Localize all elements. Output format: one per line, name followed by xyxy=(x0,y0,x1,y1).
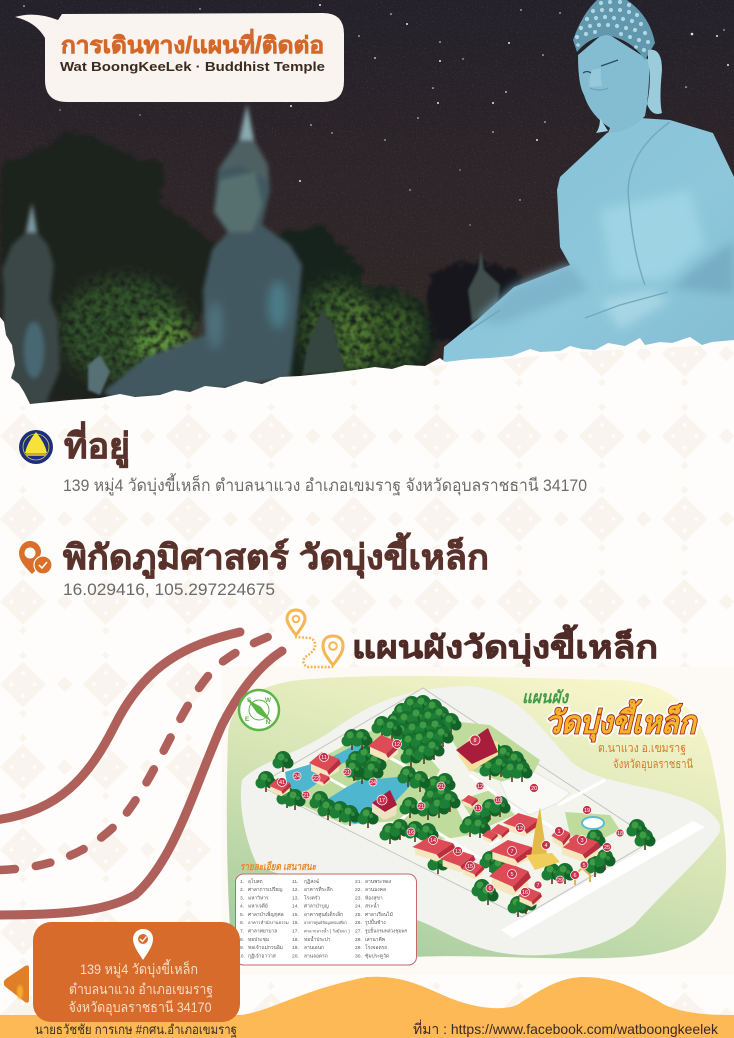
legend column one: 10. xyxy=(238,954,245,960)
footer wave xyxy=(0,977,734,1038)
icon: route pins xyxy=(287,610,343,667)
footer source link: ที่มา : https://www.facebook.com/watboongkeelek xyxy=(413,1020,719,1037)
map title xyxy=(522,688,698,772)
legend column two: 17. xyxy=(292,928,299,934)
buildings xyxy=(269,735,601,907)
dark foliage xyxy=(0,130,525,400)
lit green foliage xyxy=(60,278,423,382)
number badges: 4 xyxy=(544,843,548,849)
number badges: 16 xyxy=(408,830,414,836)
legend column one: ศาลาการเปรียญ xyxy=(248,886,282,893)
map green backdrop xyxy=(227,676,726,962)
number badges: 12 xyxy=(517,826,523,832)
ponds xyxy=(285,745,411,824)
torn paper panel xyxy=(0,317,734,420)
number badges: 6 xyxy=(488,886,492,892)
number badges: 21 xyxy=(303,793,309,799)
number badges: 21 xyxy=(418,804,424,810)
number badges: 18 xyxy=(617,831,623,837)
tree clusters xyxy=(256,695,656,917)
number badges: 25 xyxy=(604,845,610,851)
number badges: 41 xyxy=(279,780,285,786)
legend column one: ศาลาพยาบาล xyxy=(248,928,277,934)
legend column two: อาคารที่ระลึก xyxy=(304,886,333,893)
legend column two: ศาลากลางน้ำ ( วังมัจฉา ) xyxy=(304,928,350,934)
number badges: 19 xyxy=(584,808,590,814)
map title: temple name: วัดบุ่งขี้เหล็ก xyxy=(545,699,698,742)
face detail xyxy=(583,60,618,73)
legend column two: 14. xyxy=(292,904,299,910)
white access road xyxy=(501,821,705,938)
pattern on torn panel xyxy=(0,344,734,430)
legend column two: ลานเอนก xyxy=(304,946,324,951)
number badges: 20 xyxy=(531,786,537,792)
middle statue xyxy=(103,104,302,400)
legend column three: 26. xyxy=(355,920,362,926)
legend column one: 5. xyxy=(240,912,244,918)
legend column one: หอประชุม xyxy=(248,937,269,943)
title: การเดินทาง/แผนที่/ติดต่อ xyxy=(61,28,324,58)
title bubble xyxy=(15,13,344,102)
number badges: 13 xyxy=(455,849,461,855)
legend column three: 25. xyxy=(355,912,362,918)
number badges: 22 xyxy=(313,776,319,782)
heading: temple plan: แผนผังวัดบุ่งขี้เหล็ก xyxy=(352,624,658,667)
legend column one: หอเจ้าแม่กวนอิม xyxy=(248,944,283,951)
legend column two: หอน้ำประปา xyxy=(304,934,331,943)
number badges: 21 xyxy=(344,770,350,776)
legend column one: 7. xyxy=(240,928,244,934)
map title: district: ต.นาแวง อ.เขมราฐ xyxy=(598,741,686,755)
number badges: 11 xyxy=(321,755,327,761)
number badges: 1 xyxy=(557,829,561,835)
legend heading: รายละเอียด เสนาสนะ xyxy=(240,860,317,873)
subtitle: Wat BoongKeeLek · Buddhist Temple xyxy=(60,60,325,74)
number badges: 10 xyxy=(495,798,501,804)
number badges: 5 xyxy=(510,872,514,878)
legend column one: มหาวิหาร xyxy=(248,896,269,902)
ear xyxy=(647,50,662,114)
number badges: 21 xyxy=(438,784,444,790)
legend column three: 21. xyxy=(355,879,362,885)
legend column one: 6. xyxy=(240,920,244,926)
legend column two: ศาลาบำบุญ xyxy=(304,904,329,910)
number badges: 5 xyxy=(582,863,586,869)
legend column one: 2. xyxy=(240,887,244,893)
legend column two: 11. xyxy=(292,879,298,885)
map title: province: จังหวัดอุบลราชธานี xyxy=(613,757,693,772)
legend column two: อาคารศูนย์ข้อมูลท่องเที่ยว xyxy=(304,920,347,925)
number badges: 24 xyxy=(294,774,300,780)
number badges: 17 xyxy=(379,798,385,804)
map section backdrop xyxy=(222,667,734,975)
address text: 139 หมู่4 วัดบุ่งขี้เหล็ก ตำบลนาแวง อำเภอเขมราฐ จังหวัดอุบลราชธานี 34170 xyxy=(63,473,587,496)
legend column three: สระน้ำ xyxy=(365,900,380,910)
stars xyxy=(23,4,729,226)
legend column two: กุฏิสงฆ์ xyxy=(304,878,320,885)
large right statue xyxy=(443,0,734,365)
compass: E xyxy=(245,716,250,723)
grey ground xyxy=(241,686,720,955)
site ground xyxy=(258,688,653,917)
number badges: 16 xyxy=(522,890,528,896)
legend column three: ศาลาเรือนไม้ xyxy=(365,911,393,918)
temple site map xyxy=(227,676,726,965)
heading: coordinates: พิกัดภูมิศาสตร์ วัดบุ่งขี้เหล็ก xyxy=(63,532,489,579)
legend column two: ลานจอดรถ xyxy=(304,954,328,960)
legend column three: ลานมงคล xyxy=(365,888,386,893)
left statue xyxy=(2,203,60,405)
icon: emblem xyxy=(19,430,53,464)
map title: plan: แผนผัง xyxy=(522,688,570,707)
legend column two: 19. xyxy=(292,945,299,951)
address card xyxy=(33,922,240,1022)
legend column two: 20. xyxy=(292,954,299,960)
number badges: 24 xyxy=(370,780,376,786)
legend column three: ห้องสุขา xyxy=(365,894,383,902)
roundabout xyxy=(582,817,604,829)
compass: S xyxy=(247,697,252,704)
number badges: 14 xyxy=(430,838,436,844)
white paths xyxy=(305,755,605,870)
legend column one: 3. xyxy=(240,896,244,902)
arrow: back triangle xyxy=(4,965,29,1003)
legend table xyxy=(236,874,416,965)
legend column three: 24. xyxy=(355,904,362,910)
legend column one: 9. xyxy=(240,945,244,951)
legend column three: ซุ้มประตูวัด xyxy=(365,952,389,960)
gate xyxy=(575,868,590,885)
number badges: 29 xyxy=(557,878,563,884)
statue shading xyxy=(477,190,734,330)
number badges: 7 xyxy=(510,849,514,855)
card address line 2: ตำบลนาแวง อำเภอเขมราฐ xyxy=(69,981,213,998)
number badges: 7 xyxy=(536,883,540,889)
legend column three: 23. xyxy=(355,896,362,902)
legend column three: 30. xyxy=(355,954,362,960)
legend column two: อาคารศูนย์เด็กเล็ก xyxy=(304,910,343,918)
road illustration xyxy=(0,632,282,915)
legend column two: 16. xyxy=(292,920,299,926)
number badges: 12 xyxy=(394,742,400,748)
robe line and hand detail xyxy=(470,122,670,330)
legend column one: 4. xyxy=(240,904,244,910)
hair curls xyxy=(575,0,650,52)
legend column three: 27. xyxy=(355,928,362,934)
number badges: 12 xyxy=(477,784,483,790)
legend column two: 12. xyxy=(292,887,299,893)
coordinates text: 16.029416, 105.297224675 xyxy=(63,580,275,599)
legend column one: 1. xyxy=(240,879,244,885)
legend column one: อุโบสถ xyxy=(248,878,263,885)
maroon temple xyxy=(372,728,498,820)
footer credit: นายธวัชชัย การเกษ #กศน.อำเภอเขมราฐ xyxy=(35,1022,237,1038)
legend column one: ศาลาบำเพ็ญกุศล xyxy=(248,910,284,918)
compass: W xyxy=(265,697,272,704)
number badges: 3 xyxy=(580,838,584,844)
card address line 1: 139 หมู่4 วัดบุ่งขี้เหล็ก xyxy=(80,959,198,978)
legend column one: มหาเจดีย์ xyxy=(248,902,268,910)
legend column three: ลานพระทอง xyxy=(365,879,392,885)
legend column three: 29. xyxy=(355,945,362,951)
golden pagoda xyxy=(526,807,560,870)
map title: temple name: วัดบุ่งขี้เหล็ก xyxy=(545,699,698,742)
hero photo: Buddha statues at night xyxy=(0,0,734,410)
icon: location check pin xyxy=(19,541,52,574)
compass: N xyxy=(266,719,271,726)
sky grain xyxy=(0,0,734,340)
legend column two: โรงครัว xyxy=(304,894,321,902)
lawns xyxy=(280,718,620,845)
icon: white pin xyxy=(133,929,153,960)
number badges: 15 xyxy=(467,864,473,870)
legend column three: รูปปั้นกรมหลวงชุมพร xyxy=(365,928,408,934)
middle statue highlights xyxy=(208,281,288,349)
car park xyxy=(500,772,570,815)
head xyxy=(578,32,649,133)
small distant statues xyxy=(88,250,500,395)
legend column two: 13. xyxy=(292,896,299,902)
legend column two: 15. xyxy=(292,912,299,918)
legend column three: รูปปั้นช้าง xyxy=(365,917,386,926)
legend column three: 28. xyxy=(355,937,362,943)
number badges: 11 xyxy=(475,806,481,812)
legend column one: อาคารสำนักงานธรรม xyxy=(248,920,289,925)
number badges: 8 xyxy=(473,738,477,744)
legend column one: 8. xyxy=(240,937,244,943)
legend column two: 18. xyxy=(292,937,299,943)
legend column three: เสานาคีพ xyxy=(365,936,385,943)
legend column one: กุฏิเจ้าอาวาส xyxy=(248,952,276,960)
legend column three: 22. xyxy=(355,887,362,893)
number badges xyxy=(278,735,624,896)
number badges: 6 xyxy=(573,873,577,879)
heading: address: ที่อยู่ xyxy=(64,421,130,468)
card address line 3: จังหวัดอุบลราชธานี 34170 xyxy=(68,999,212,1016)
night sky xyxy=(0,0,734,410)
compass xyxy=(239,690,279,730)
legend column three: โรงจอดรถ xyxy=(365,944,387,951)
